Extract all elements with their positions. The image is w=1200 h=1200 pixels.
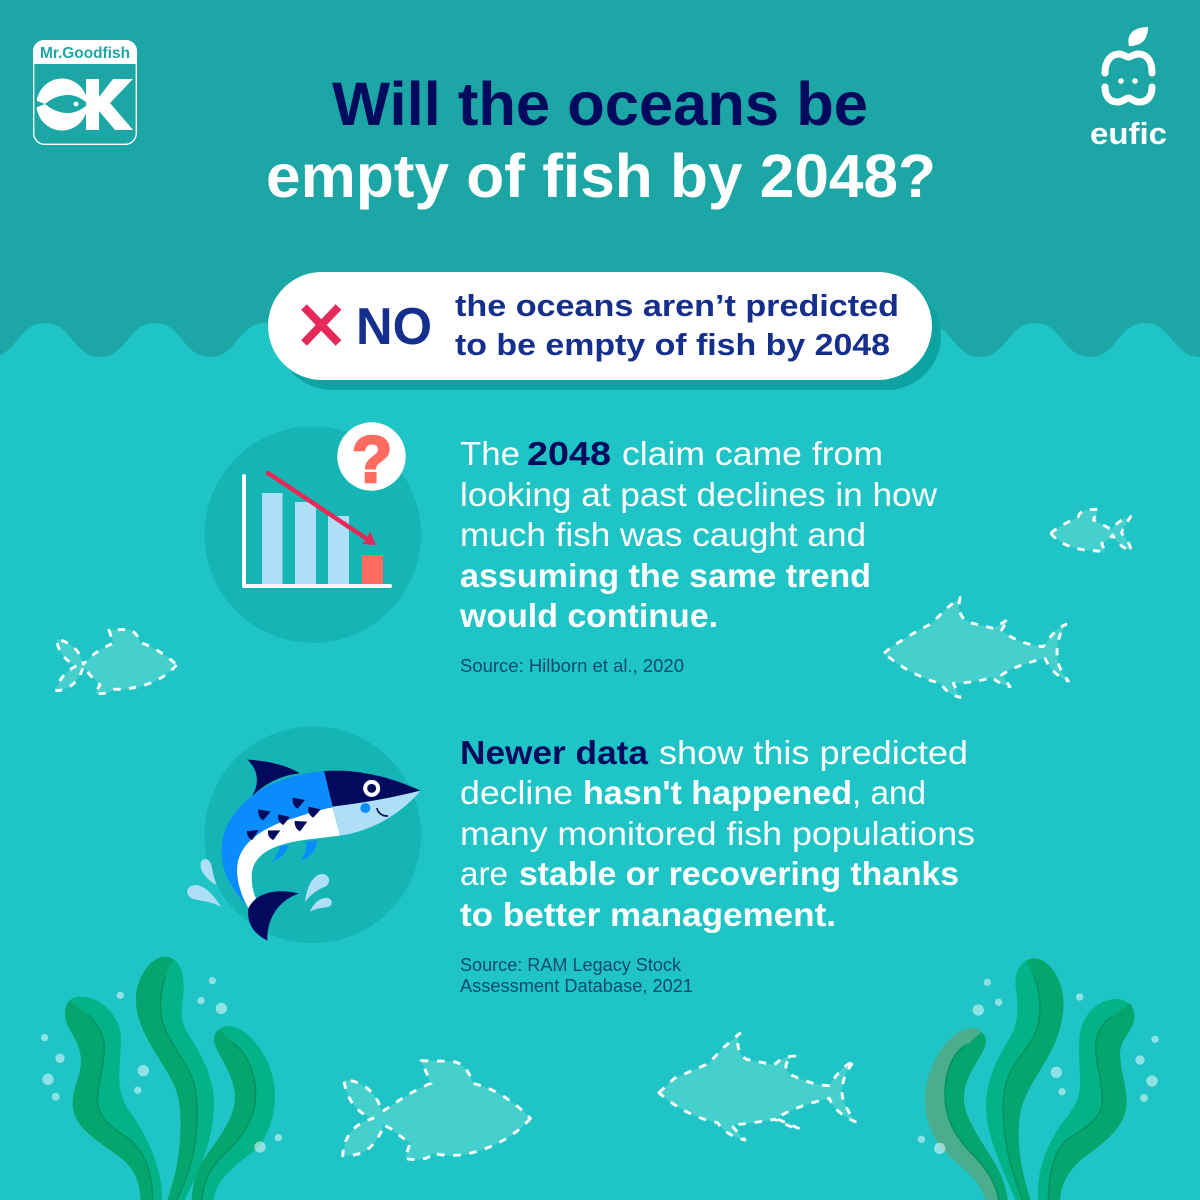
text block: newer data: Newer data <box>460 734 649 771</box>
text block: newer data: decline <box>460 774 573 811</box>
title: empty of fish by 2048? <box>266 142 936 210</box>
verdict text <box>455 288 899 362</box>
logo: Mr.Goodfish OK: Mr.Goodfish <box>40 45 130 62</box>
ghost fish: small right <box>1051 509 1132 552</box>
logo: Mr.Goodfish OK <box>33 40 137 144</box>
text block: newer data: many monitored fish populations <box>460 815 975 852</box>
verdict text: the oceans aren’t predicted <box>455 288 899 323</box>
text block: newer data: stable or recovering thanks <box>519 855 959 892</box>
text block: 2048 claim: The <box>460 435 520 472</box>
text block: newer data: , and <box>852 774 926 811</box>
icon: declining bar chart with question mark <box>204 422 421 643</box>
logo: eufic <box>1090 27 1167 151</box>
text block: newer data: show this predicted <box>659 734 968 771</box>
text block: 2048 claim: claim came from <box>622 435 883 472</box>
ghost fish: bottom tuna <box>659 1033 855 1140</box>
text block: 2048 claim: assuming the same trend <box>460 557 871 594</box>
text block: 2048 claim: much fish was caught and <box>460 516 866 553</box>
source 2 <box>460 955 693 996</box>
title <box>266 70 936 210</box>
verdict text: to be empty of fish by 2048 <box>455 327 890 362</box>
background: sky band <box>0 0 1200 400</box>
text block: 2048 claim: looking at past declines in how <box>460 476 937 513</box>
bubbles <box>41 977 282 1153</box>
ghost fish: bottom left <box>343 1061 530 1160</box>
icon: jumping fish <box>187 726 421 943</box>
bubbles <box>918 979 1159 1154</box>
text block: newer data <box>460 734 975 996</box>
text block: 2048 claim <box>459 435 937 676</box>
icon: declining bar chart with question mark: ? <box>352 422 392 496</box>
source 2: Assessment Database, 2021 <box>460 976 693 996</box>
source 2: Source: RAM Legacy Stock <box>460 955 682 975</box>
water splashes <box>187 859 332 912</box>
logo: eufic: eufic <box>1090 116 1167 151</box>
text block: newer data: hasn't happened <box>583 774 852 811</box>
seaweed: right <box>918 958 1159 1200</box>
text block: newer data: are <box>460 855 508 892</box>
text block: newer data: to better management. <box>460 896 836 933</box>
source 1: Source: Hilborn et al., 2020 <box>460 656 684 676</box>
verdict pill <box>268 272 941 390</box>
text block: 2048 claim: would continue. <box>459 597 718 634</box>
seaweed: left <box>41 957 282 1200</box>
ghost fish: left <box>57 629 177 694</box>
background: water with waves <box>0 323 1200 1200</box>
ghost fish: tuna right <box>884 598 1068 697</box>
text block: 2048 claim: 2048 <box>527 435 611 472</box>
verdict word: NO <box>356 298 432 356</box>
title: Will the oceans be <box>332 70 868 138</box>
icon: red cross <box>304 307 338 343</box>
